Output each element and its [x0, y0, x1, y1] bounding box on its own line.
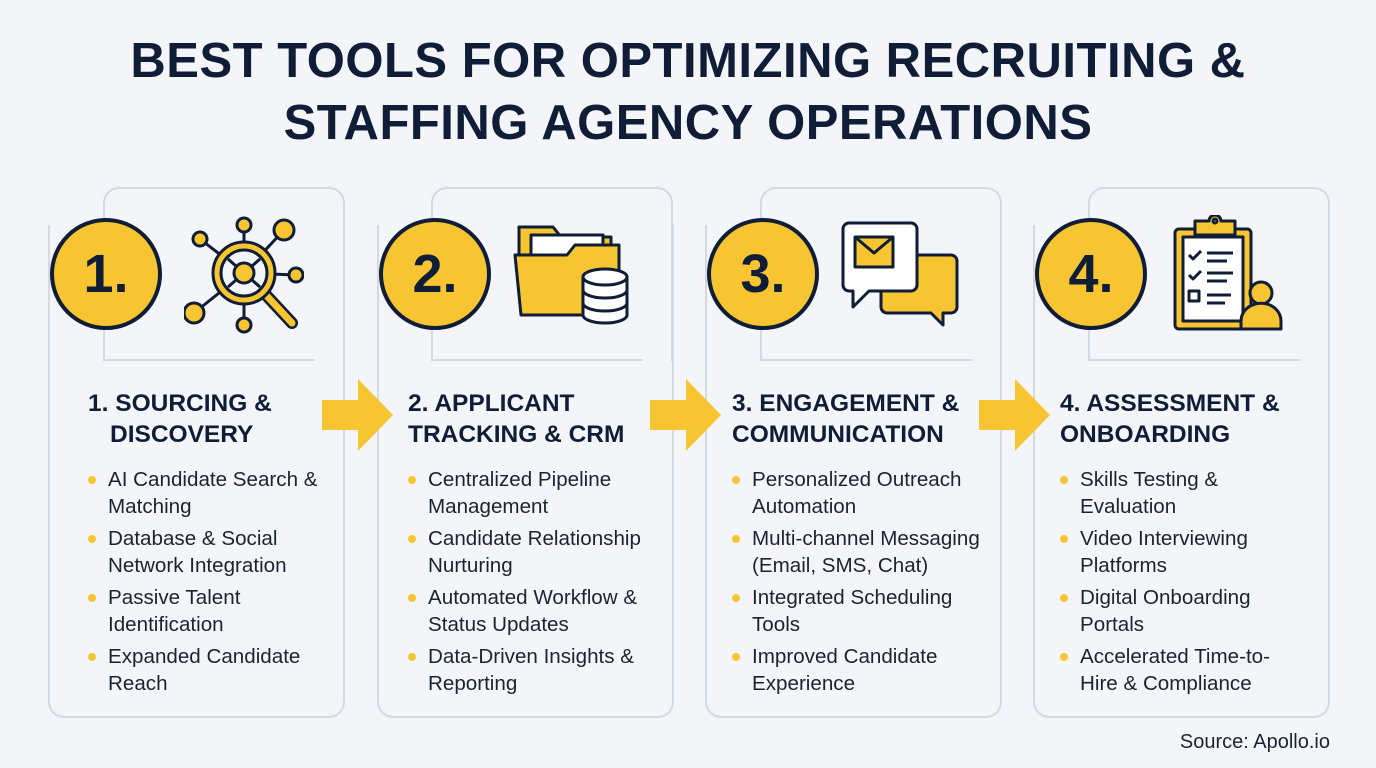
bullet list: Network Integration — [108, 554, 287, 577]
bullet list: Improved Candidate — [752, 645, 937, 668]
bullet list: Automated Workflow & — [428, 586, 637, 609]
bullet list: Multi-channel Messaging — [752, 527, 980, 550]
bullet list: Nurturing — [428, 554, 513, 577]
heading — [732, 390, 959, 448]
number circle 3 — [707, 218, 819, 330]
bullet list — [1060, 468, 1270, 695]
arrow 3 — [979, 379, 1050, 451]
bullet list: Status Updates — [428, 613, 569, 636]
arrow 1 — [322, 379, 393, 451]
bullet list: Reporting — [428, 672, 517, 695]
bullet list: Portals — [1080, 613, 1144, 636]
number circle 2 — [379, 218, 491, 330]
number circle 2: 2. — [412, 244, 458, 304]
bullet list: Expanded Candidate — [108, 645, 300, 668]
bullet list — [88, 468, 318, 695]
heading — [1060, 390, 1280, 448]
bullet list: Automation — [752, 495, 856, 518]
bullet list: Video Interviewing — [1080, 527, 1248, 550]
panel: assessment — [1033, 187, 1330, 718]
bullet list: Tools — [752, 613, 800, 636]
bullet list — [732, 468, 980, 695]
bullet list: Integrated Scheduling — [752, 586, 952, 609]
bullet list: Platforms — [1080, 554, 1167, 577]
arrow 2 — [650, 379, 721, 451]
heading: ONBOARDING — [1060, 421, 1230, 448]
bullet list: Skills Testing & — [1080, 468, 1218, 491]
heading — [88, 390, 272, 448]
bullet list: Digital Onboarding — [1080, 586, 1251, 609]
heading: 2. APPLICANT — [408, 390, 575, 417]
heading: 4. ASSESSMENT & — [1060, 390, 1280, 417]
heading: COMMUNICATION — [732, 421, 944, 448]
bullet list — [408, 468, 641, 695]
number circle 1 — [50, 218, 162, 330]
bullet list: Management — [428, 495, 548, 518]
panel: sourcing — [48, 187, 345, 718]
bullet list: Personalized Outreach — [752, 468, 962, 491]
icon: network magnifier — [184, 216, 304, 334]
source note: Source: Apollo.io — [1180, 731, 1330, 753]
panel: engagement — [705, 187, 1002, 718]
number circle 1: 1. — [83, 244, 129, 304]
icon: folder database — [514, 226, 628, 324]
title: BEST TOOLS FOR OPTIMIZING RECRUITING & — [130, 34, 1246, 88]
bullet list: Data-Driven Insights & — [428, 645, 634, 668]
bullet list: Candidate Relationship — [428, 527, 641, 550]
bullet list: Passive Talent — [108, 586, 240, 609]
bullet list: AI Candidate Search & — [108, 468, 318, 491]
title — [130, 34, 1246, 150]
bullet list: Reach — [108, 672, 168, 695]
bullet list: Evaluation — [1080, 495, 1176, 518]
heading: 1. SOURCING & — [88, 390, 272, 417]
bullet list: Centralized Pipeline — [428, 468, 611, 491]
heading: TRACKING & CRM — [408, 421, 624, 448]
title: STAFFING AGENCY OPERATIONS — [284, 96, 1092, 150]
heading: 3. ENGAGEMENT & — [732, 390, 959, 417]
bullet list: Identification — [108, 613, 224, 636]
icon: chat bubbles — [842, 222, 958, 326]
bullet list: Database & Social — [108, 527, 277, 550]
number circle 3: 3. — [740, 244, 786, 304]
number circle 4: 4. — [1068, 244, 1114, 304]
bullet list: Matching — [108, 495, 192, 518]
number circle 4 — [1035, 218, 1147, 330]
bullet list: Hire & Compliance — [1080, 672, 1252, 695]
panel: applicant tracking — [377, 187, 674, 718]
heading: DISCOVERY — [110, 421, 253, 448]
heading — [408, 390, 624, 448]
bullet list: Accelerated Time-to- — [1080, 645, 1270, 668]
bullet list: (Email, SMS, Chat) — [752, 554, 928, 577]
icon: clipboard person — [1174, 215, 1282, 330]
bullet list: Experience — [752, 672, 855, 695]
